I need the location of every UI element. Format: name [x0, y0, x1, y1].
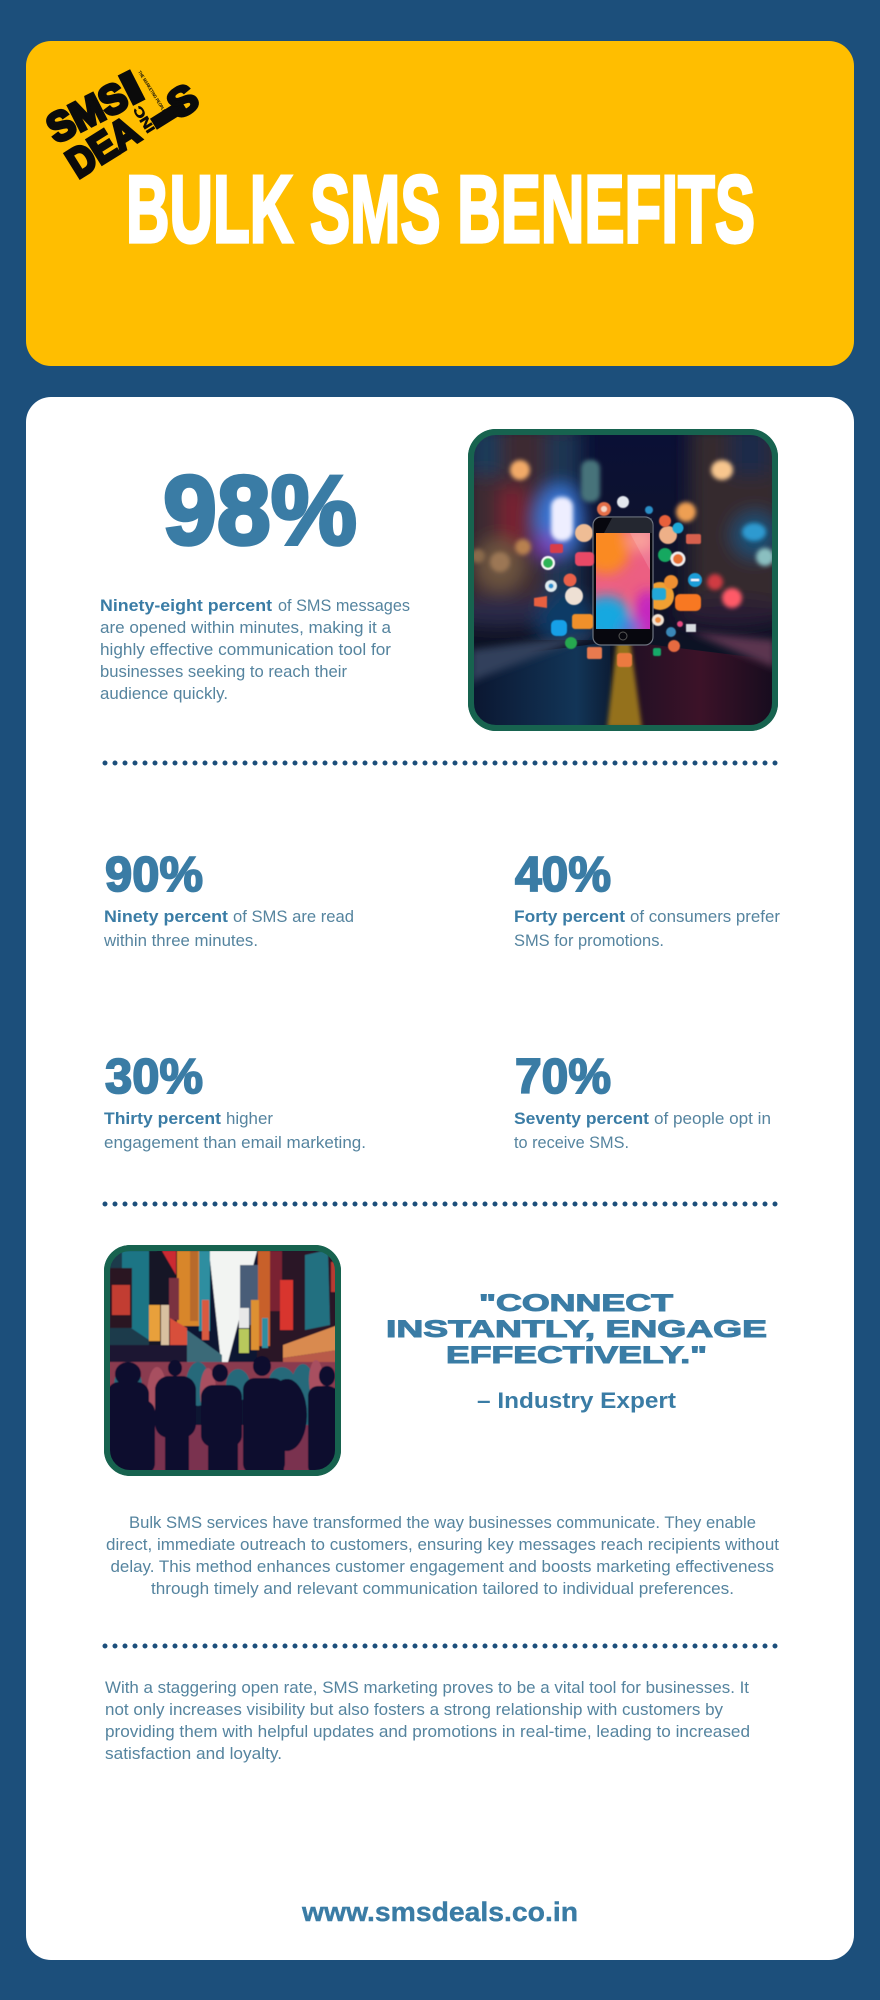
quote: EFFECTIVELY."	[446, 1342, 707, 1369]
quote: "CONNECT	[479, 1290, 674, 1317]
stat: 40%: SMS for promotions.	[514, 932, 664, 950]
logo: SMS Deals: SMS	[39, 73, 135, 152]
stat: 30%: higher	[226, 1110, 274, 1128]
logo: SMS Deals: S	[159, 75, 207, 128]
road	[536, 640, 595, 650]
logo: SMS Deals: DEA	[58, 107, 147, 187]
stat: 90%	[103, 848, 354, 950]
stat: 30%: engagement than email marketing.	[104, 1134, 366, 1152]
bokeh lights	[471, 460, 774, 608]
stat: 70%	[514, 1050, 771, 1152]
divider	[105, 760, 776, 766]
paragraph: bulk SMS services: through timely and relevant communication tailored to individual preferences.	[151, 1580, 734, 1598]
stat: 70%: Seventy percent	[514, 1110, 650, 1128]
98% description: businesses seeking to reach their	[100, 663, 348, 681]
paragraph: bulk SMS services: delay. This method enhances customer engagement and boosts marketing effectiveness	[110, 1558, 774, 1576]
divider	[105, 1202, 776, 1206]
stat: 90%: 90%	[105, 848, 203, 902]
stat: 30%: 30%	[105, 1050, 203, 1104]
paragraph: open rate: satisfaction and loyalty.	[105, 1745, 282, 1763]
paragraph: bulk SMS services	[106, 1514, 779, 1598]
main white panel	[26, 397, 854, 1960]
right buildings	[256, 1251, 335, 1362]
98% description	[100, 597, 410, 703]
sky	[209, 1251, 257, 1362]
street	[152, 1424, 310, 1470]
stat: 40%: Forty percent	[514, 908, 626, 926]
far crowd	[107, 1362, 338, 1388]
website footer: www.smsdeals.co.in	[301, 1897, 578, 1927]
stat: 90%: within three minutes.	[103, 932, 258, 950]
bubbles	[565, 524, 677, 610]
quote	[386, 1290, 767, 1369]
logo: SMS Deals: INC	[130, 103, 158, 136]
98% description: are opened within minutes, making it a	[100, 619, 392, 637]
quote attribution: – Industry Expert	[477, 1388, 677, 1413]
logo: SMS Deals	[39, 66, 207, 187]
stat: 70%: 70%	[515, 1050, 611, 1104]
stat: 40%: of consumers prefer	[630, 908, 781, 926]
stat: 30%	[104, 1050, 366, 1152]
stat: 70%: to receive SMS.	[514, 1134, 629, 1152]
divider	[105, 1644, 776, 1648]
logo: SMS Deals: THE MARKETING PEOPLE	[137, 70, 167, 113]
stat: 90%: of SMS are read	[233, 908, 354, 926]
phone	[593, 517, 653, 645]
stat: 40%	[514, 848, 781, 950]
98% description: Ninety-eight percent	[100, 597, 273, 615]
app icons	[534, 496, 702, 667]
paragraph: open rate: With a staggering open rate, SMS marketing proves to be a vital tool for businesses. It	[105, 1679, 749, 1697]
stat: 90%: Ninety percent	[104, 908, 229, 926]
image: crowd in a neon city street	[104, 1245, 341, 1477]
stat: 70%: of people opt in	[654, 1110, 771, 1128]
header background	[26, 41, 854, 366]
paragraph: open rate: not only increases visibility but also fosters a strong relationship with customers by	[105, 1701, 724, 1719]
stat: 98%	[100, 455, 410, 703]
header panel	[26, 41, 854, 366]
98% number: 98%	[163, 455, 357, 565]
paragraph: bulk SMS services: Bulk SMS services have transformed the way businesses communicate. They enable	[129, 1514, 756, 1532]
98% description: audience quickly.	[100, 685, 228, 703]
silhouettes	[107, 1356, 338, 1477]
stat: 40%: 40%	[515, 848, 611, 902]
quote: INSTANTLY, ENGAGE	[386, 1316, 767, 1343]
image: phone with app icons on a night street	[468, 429, 778, 731]
paragraph: open rate	[105, 1679, 750, 1763]
98% description: highly effective communication tool for	[100, 641, 392, 659]
paragraph: bulk SMS services: direct, immediate outreach to customers, ensuring key messages reach recipients without	[106, 1536, 779, 1554]
98% description: of SMS messages	[278, 597, 410, 615]
stat: 30%: Thirty percent	[104, 1110, 222, 1128]
paragraph: open rate: providing them with helpful updates and promotions in real-time, leading to increased	[105, 1723, 750, 1741]
left buildings	[110, 1251, 157, 1346]
